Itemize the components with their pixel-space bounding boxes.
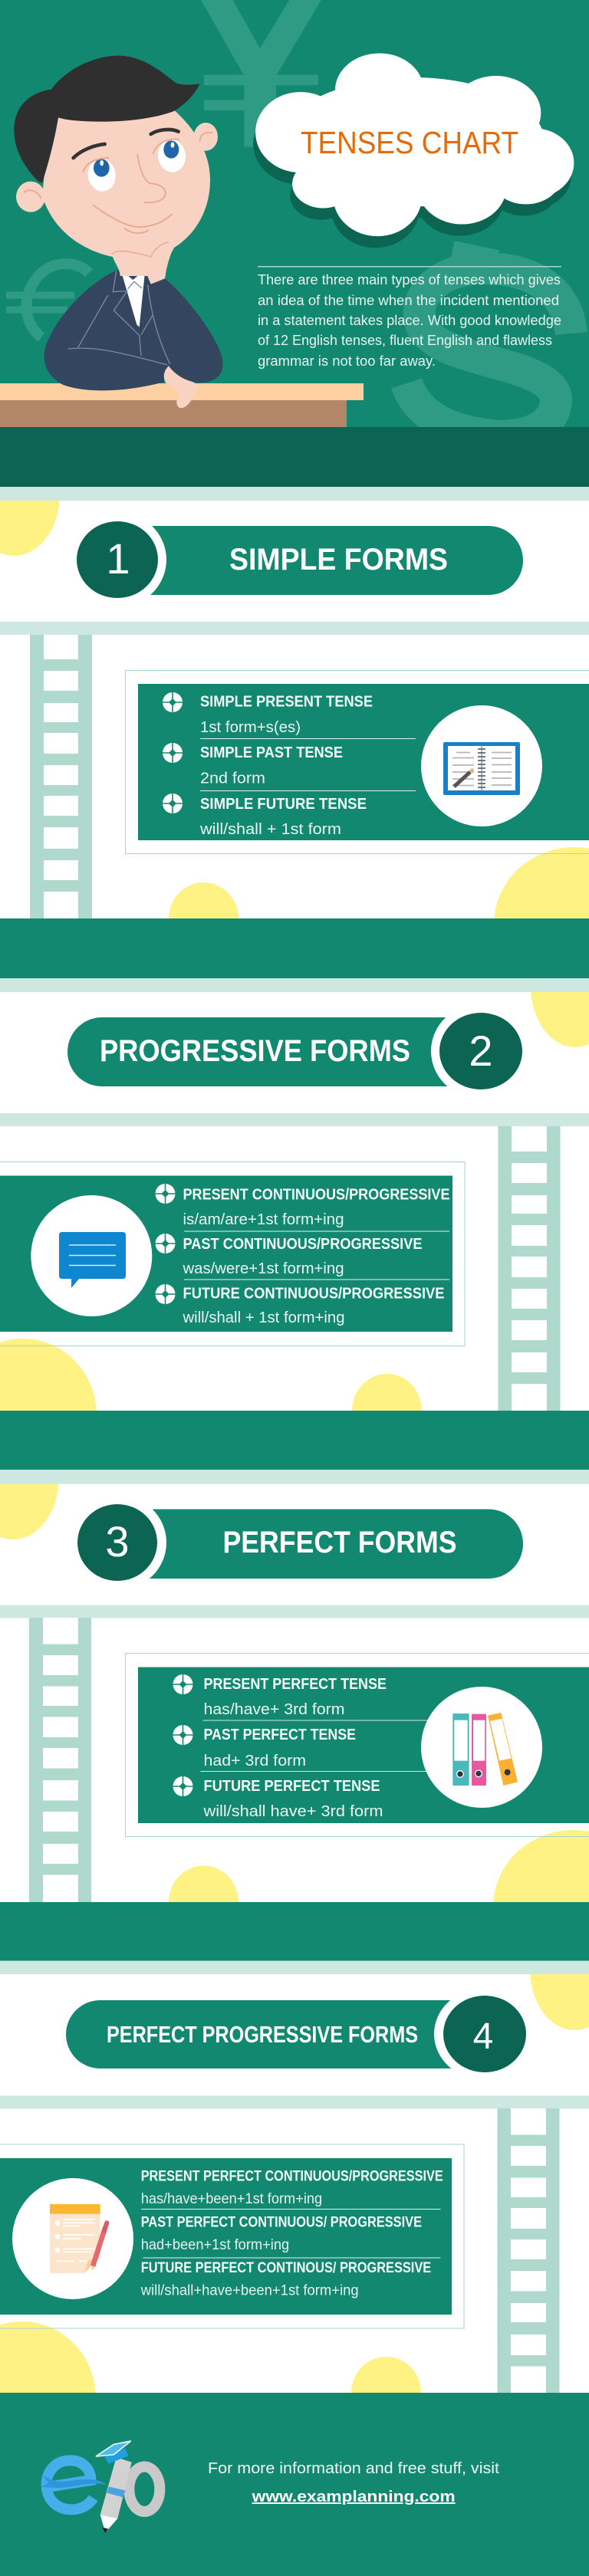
- section 1 heading pill: [67, 512, 523, 607]
- panel: perfect forms: [126, 1653, 589, 1837]
- character: thinking man: [14, 56, 223, 408]
- tense list: 1st form+s(es): [200, 719, 301, 736]
- decorative circles: section 2: [0, 992, 589, 1411]
- tense list: SIMPLE PRESENT TENSE: [200, 693, 373, 710]
- intro paragraph: of 12 English tenses, fluent English and flawless: [258, 333, 552, 348]
- band: top of section 2: [0, 978, 589, 992]
- section 2 heading pill: [67, 1004, 531, 1099]
- footer band section 2: [0, 1411, 589, 1470]
- footer call to action: [208, 2460, 499, 2505]
- tense list: is/am/are+1st form+ing: [183, 1211, 344, 1228]
- number 4: 4: [473, 2016, 493, 2057]
- icon: checklist and pencil: [12, 2178, 133, 2299]
- tense list: [201, 1676, 429, 1820]
- footer call to action: For more information and free stuff, visit: [208, 2460, 499, 2477]
- section 3 heading pill: [67, 1495, 523, 1590]
- bullets: [163, 692, 183, 813]
- tense list: PAST PERFECT TENSE: [204, 1727, 356, 1743]
- suit: [44, 255, 223, 408]
- icon: speech bubble: [31, 1195, 152, 1316]
- tense list: had+ 3rd form: [204, 1753, 306, 1769]
- tense list: FUTURE CONTINUOUS/PROGRESSIVE: [183, 1285, 445, 1302]
- band: [0, 1113, 589, 1126]
- tense list: [140, 2169, 443, 2299]
- heading: SIMPLE FORMS: [229, 543, 448, 577]
- tense list: PRESENT PERFECT TENSE: [204, 1676, 387, 1693]
- header background: [0, 0, 589, 427]
- panel: progressive forms: [0, 1162, 465, 1346]
- heading: PERFECT FORMS: [222, 1526, 457, 1559]
- footer panel: [0, 2393, 589, 2576]
- intro paragraph: grammar is not too far away.: [258, 353, 436, 369]
- band: [0, 2096, 589, 2108]
- band: top of section 3: [0, 1470, 589, 1484]
- intro paragraph: [258, 272, 561, 369]
- dollar symbol watermark: [406, 241, 571, 436]
- tense list: 2nd form: [200, 770, 265, 787]
- icon: binders: [421, 1687, 542, 1808]
- tense list: will/shall + 1st form: [199, 821, 341, 838]
- thought cloud with title: [253, 53, 574, 248]
- tense list: [199, 693, 416, 838]
- band: top of section 1: [0, 487, 589, 501]
- icon: notebook: [421, 705, 542, 826]
- tense list: PRESENT CONTINUOUS/PROGRESSIVE: [183, 1187, 449, 1204]
- tense list: will/shall+have+been+1st form+ing: [140, 2283, 359, 2299]
- band: [0, 622, 589, 635]
- yen symbol watermark: [201, 0, 321, 147]
- ladder: section 4: [497, 2108, 560, 2393]
- tense list: will/shall + 1st form+ing: [182, 1309, 345, 1326]
- panel: simple forms: [126, 670, 589, 854]
- tense list: PAST CONTINUOUS/PROGRESSIVE: [183, 1236, 422, 1253]
- intro paragraph: There are three main types of tenses which gives: [258, 272, 561, 288]
- bullets: [173, 1674, 193, 1796]
- footer band section 3: [0, 1902, 589, 1961]
- ladder: section 2: [499, 1126, 560, 1411]
- number 2: 2: [469, 1027, 493, 1075]
- tense list: PAST PERFECT CONTINUOUS/ PROGRESSIVE: [141, 2214, 422, 2230]
- website link: www.examplanning.com: [251, 2489, 456, 2505]
- intro paragraph: in a statement takes place. With good knowledge: [258, 313, 561, 328]
- number 3: 3: [105, 1517, 130, 1566]
- dark band under header: [0, 427, 589, 487]
- ladder: section 1: [30, 635, 92, 918]
- desk: [0, 383, 364, 427]
- footer band section 1: [0, 918, 589, 978]
- tense list: was/were+1st form+ing: [182, 1260, 344, 1277]
- tense list: SIMPLE FUTURE TENSE: [200, 796, 367, 813]
- ladder: section 3: [29, 1618, 91, 1902]
- tense list: has/have+been+1st form+ing: [141, 2191, 322, 2207]
- tense list: FUTURE PERFECT CONTINOUS/ PROGRESSIVE: [141, 2260, 431, 2276]
- bullets: [155, 1184, 175, 1304]
- decorative circles: section 3: [0, 1484, 589, 1902]
- band: top of section 4: [0, 1961, 589, 1974]
- logo: ep with pencil and cap: [41, 2441, 160, 2533]
- tense list: PRESENT PERFECT CONTINUOUS/PROGRESSIVE: [141, 2169, 443, 2185]
- decorative circles: section 4: [0, 1974, 589, 2393]
- band: [0, 1605, 589, 1618]
- head: [14, 56, 218, 276]
- heading: PROGRESSIVE FORMS: [100, 1034, 410, 1068]
- tense list: has/have+ 3rd form: [204, 1701, 345, 1718]
- intro paragraph: an idea of the time when the incident mentioned: [258, 293, 559, 308]
- decorative circles: section 1: [0, 501, 589, 918]
- tense list: [182, 1187, 449, 1326]
- panel: perfect progressive forms: [0, 2144, 464, 2328]
- heading: PERFECT PROGRESSIVE FORMS: [107, 2021, 418, 2048]
- number 1: 1: [106, 534, 130, 583]
- rule above intro: [258, 266, 561, 267]
- tense list: will/shall have+ 3rd form: [202, 1803, 383, 1820]
- tense list: had+been+1st form+ing: [141, 2237, 289, 2253]
- title: TENSES CHART: [301, 125, 518, 160]
- euro symbol watermark: [6, 264, 89, 337]
- section 4 heading pill: [66, 1988, 535, 2080]
- tense list: FUTURE PERFECT TENSE: [204, 1778, 380, 1795]
- tense list: SIMPLE PAST TENSE: [200, 744, 343, 761]
